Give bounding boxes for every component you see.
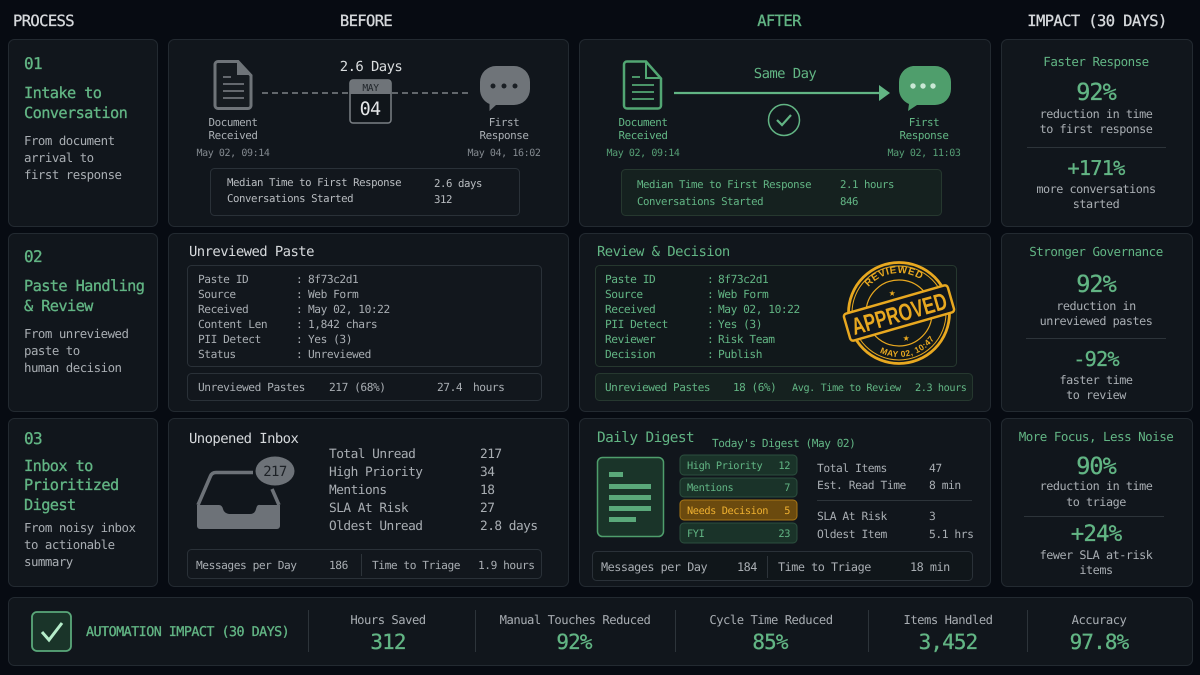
panel: process 03: Inbox to <box>24 457 93 475</box>
paste record: Status <box>198 348 236 361</box>
review record: : <box>707 348 713 361</box>
panel: impact faster response: +171% <box>1068 156 1125 180</box>
metric: hours saved <box>350 613 426 654</box>
inbox stats: 2.8 days <box>480 519 538 534</box>
stamp: approved: APPROVED <box>849 288 950 341</box>
panel: impact governance: unreviewed pastes <box>1040 314 1152 328</box>
digest metrics: Time to Triage <box>778 560 871 574</box>
digest categories: 23 <box>778 528 790 540</box>
column headers: IMPACT (30 DAYS) <box>1027 12 1167 30</box>
paste record: : <box>296 303 302 316</box>
metric: items handled <box>903 613 993 654</box>
review record: Paste ID <box>605 273 656 286</box>
panel: automation impact bar: AUTOMATION IMPACT (30 DAYS) <box>86 625 289 640</box>
stamp: approved: MAY 02, 10:47 <box>880 336 933 357</box>
digest stats: Total Items <box>817 462 887 475</box>
panel: impact focus: 90% <box>1076 452 1117 480</box>
review record: Decision <box>605 348 655 361</box>
panel: process 03: to actionable <box>24 537 115 552</box>
inbox stats: 34 <box>480 465 495 480</box>
digest stats: Est. Read Time <box>817 479 907 492</box>
panel: after intake: May 02, 09:14 <box>606 148 680 159</box>
inbox metrics: 1.9 hours <box>478 559 535 572</box>
inbox stats: 217 <box>480 447 502 462</box>
panel: process 01: From document <box>24 133 115 148</box>
digest categories: 7 <box>784 482 790 494</box>
panel: impact governance: 92% <box>1076 270 1117 298</box>
panel: after intake: Received <box>619 129 667 142</box>
panel: process 01: first response <box>24 167 122 182</box>
panel: after review: Review & Decision <box>597 244 730 260</box>
panel: process 03: summary <box>24 554 73 569</box>
paste record: 8f73c2d1 <box>308 273 358 286</box>
stats box: 2.1 hours <box>840 178 894 191</box>
review record: May 02, 10:22 <box>718 303 800 316</box>
metric: accuracy <box>1070 613 1130 654</box>
icon: check circle <box>768 104 800 136</box>
inbox metrics: Messages per Day <box>196 559 297 572</box>
stamp: approved: REVIEWED <box>864 266 922 286</box>
digest categories <box>680 455 797 543</box>
panel: before paste <box>168 234 568 412</box>
panel: before intake <box>168 40 568 226</box>
review record: : <box>707 288 713 301</box>
review metrics <box>596 374 972 400</box>
metric: cycle time: 85% <box>752 630 789 654</box>
review record: Risk Team <box>718 333 775 346</box>
review metrics: Unreviewed Pastes <box>605 381 710 394</box>
panel: before intake: Document <box>209 116 257 129</box>
column headers: AFTER <box>757 12 802 30</box>
column headers: PROCESS <box>13 12 74 30</box>
panel: impact focus: reduction in time <box>1040 479 1153 493</box>
panel: automation impact bar <box>8 598 1192 666</box>
paste record: : <box>296 348 302 361</box>
digest stats: 5.1 hrs <box>929 528 973 541</box>
digest stats: 3 <box>929 510 935 523</box>
metric: cycle time <box>709 613 833 654</box>
panel: impact faster response: reduction in time <box>1040 107 1153 121</box>
panel: process 02: human decision <box>24 360 122 375</box>
paste record <box>188 266 542 366</box>
review record: : <box>707 303 713 316</box>
panel: before intake: First <box>489 116 519 129</box>
review record: 8f73c2d1 <box>718 273 768 286</box>
inbox metrics <box>188 550 542 578</box>
column headers <box>13 12 1167 30</box>
panel: impact faster response: Faster Response <box>1043 54 1149 69</box>
paste record: Received <box>198 303 248 316</box>
metric: manual touches <box>500 613 650 654</box>
metric: items handled: 3,452 <box>919 630 977 654</box>
inbox stats: High Priority <box>329 465 423 480</box>
inbox metrics: Time to Triage <box>372 559 461 572</box>
paste record: : <box>296 333 302 346</box>
panel: before intake: May 04, 16:02 <box>467 148 541 159</box>
panel: process 02: paste to <box>24 343 80 358</box>
digest categories: High Priority <box>687 460 762 472</box>
stats box <box>622 170 942 216</box>
paste metrics <box>188 374 542 400</box>
panel: after digest: Today's Digest (May 02) <box>712 437 855 450</box>
icon: document grey <box>215 61 251 108</box>
panel: before inbox <box>168 418 568 586</box>
review record: : <box>707 333 713 346</box>
stamp: approved: ★ <box>889 286 896 299</box>
column headers: BEFORE <box>340 12 392 30</box>
review record: : <box>707 318 713 331</box>
digest categories: FYI <box>687 528 705 540</box>
icon: calendar: 04 <box>360 99 381 120</box>
panel: after digest <box>580 418 990 586</box>
panel: after intake: First <box>909 116 939 129</box>
digest categories: Needs Decision <box>687 505 768 517</box>
metric: accuracy: Accuracy <box>1072 613 1127 627</box>
panel: process 01 <box>8 40 158 226</box>
panel: after digest: Daily Digest <box>597 430 694 446</box>
panel: process 01: 01 <box>24 54 42 73</box>
digest categories: Mentions <box>687 482 734 494</box>
panel: before intake: Received <box>209 129 257 142</box>
paste record: Paste ID <box>198 273 249 286</box>
review record: Web Form <box>718 288 769 301</box>
digest stats: Oldest Item <box>817 528 887 541</box>
icon: speech bubble grey <box>480 66 530 111</box>
panel: after intake: Document <box>619 116 667 129</box>
panel: process 02 <box>8 234 158 412</box>
stats box: Median Time to First Response <box>637 178 811 191</box>
stamp: approved: ★ <box>903 331 910 344</box>
stats box: 2.6 days <box>434 177 482 190</box>
panel: before paste: Unreviewed Paste <box>189 244 314 260</box>
paste record: Yes (3) <box>308 333 352 346</box>
review metrics: 2.3 hours <box>915 383 967 394</box>
panel: impact faster response: more conversations <box>1036 182 1156 196</box>
inbox stats: 27 <box>480 501 494 516</box>
metric: hours saved: Hours Saved <box>350 613 426 627</box>
panel: impact faster response: started <box>1073 197 1119 211</box>
digest stats: SLA At Risk <box>817 510 887 523</box>
digest categories: 12 <box>778 460 790 472</box>
panel: before intake: May 02, 09:14 <box>196 148 270 159</box>
paste metrics: hours <box>473 381 504 394</box>
inbox stats: Total Unread <box>329 447 415 462</box>
panel: process 02: & Review <box>24 297 94 315</box>
stats box: Conversations Started <box>637 195 763 208</box>
panel: impact governance <box>1002 234 1192 412</box>
panel: process 02: Paste Handling <box>24 277 144 295</box>
paste record: 1,842 chars <box>308 318 377 331</box>
review metrics: Avg. Time to Review <box>792 383 902 394</box>
metric: manual touches: 92% <box>556 630 593 654</box>
panel: process 03: From noisy inbox <box>24 520 135 535</box>
metric: accuracy: 97.8% <box>1070 630 1130 654</box>
inbox stats: Oldest Unread <box>329 519 423 534</box>
inbox stats: 18 <box>480 483 494 498</box>
stats box: 312 <box>434 193 452 206</box>
icon: speech bubble green <box>899 66 951 111</box>
panel: process 01: Intake to <box>24 84 102 102</box>
metric: items handled: Items Handled <box>903 613 993 627</box>
metric: manual touches: Manual Touches Reduced <box>500 613 650 627</box>
panel: impact focus: More Focus, Less Noise <box>1019 429 1173 444</box>
panel: impact faster response: 92% <box>1076 78 1117 106</box>
inbox stats: Mentions <box>329 483 387 498</box>
label: same day: Same Day <box>754 66 816 82</box>
inbox metrics: 186 <box>329 559 349 572</box>
review record <box>596 266 956 366</box>
panel: process 03: Prioritized <box>24 476 119 494</box>
review metrics: 18 (6%) <box>733 381 776 394</box>
panel: impact focus: fewer SLA at-risk <box>1040 548 1153 562</box>
panel: process 01: arrival to <box>24 150 94 165</box>
digest metrics: 184 <box>737 560 757 574</box>
panel: impact governance: to review <box>1066 388 1127 402</box>
paste record: PII Detect <box>198 333 261 346</box>
paste record: Unreviewed <box>308 348 371 361</box>
digest metrics: Messages per Day <box>601 560 707 574</box>
metric: cycle time: Cycle Time Reduced <box>709 613 833 627</box>
panel: impact faster response <box>1002 40 1192 226</box>
paste metrics: Unreviewed Pastes <box>198 381 305 394</box>
panel: impact governance: faster time <box>1060 373 1133 387</box>
paste record: May 02, 10:22 <box>308 303 390 316</box>
inbox stats <box>329 447 538 534</box>
panel: before inbox: Unopened Inbox <box>189 431 298 447</box>
paste record: : <box>296 318 302 331</box>
panel: impact focus <box>1002 418 1192 586</box>
digest stats: 47 <box>929 462 942 475</box>
panel: impact faster response: to first response <box>1040 122 1153 136</box>
inbox stats: SLA At Risk <box>329 501 409 516</box>
panel: impact governance: -92% <box>1073 347 1119 371</box>
stats box: Conversations Started <box>227 192 353 205</box>
review record: Received <box>605 303 655 316</box>
digest stats <box>817 462 973 541</box>
panel: impact governance: reduction in <box>1056 299 1136 313</box>
digest metrics: 18 min <box>910 560 950 574</box>
icon: inbox tray <box>197 456 294 529</box>
stats box: 846 <box>840 195 858 208</box>
duration label: 2.6 Days <box>340 59 402 75</box>
panel: process 03: Digest <box>24 496 76 514</box>
paste record: : <box>296 273 302 286</box>
stats box: Median Time to First Response <box>227 176 401 189</box>
panel: impact focus: +24% <box>1071 521 1123 547</box>
paste record: : <box>296 288 302 301</box>
review record: Source <box>605 288 643 301</box>
paste metrics: 27.4 <box>437 381 463 394</box>
stats box <box>210 168 520 216</box>
review record: PII Detect <box>605 318 668 331</box>
panel: process 02: 02 <box>24 247 42 266</box>
icon: document green <box>624 62 661 108</box>
dashed timeline <box>262 92 472 94</box>
panel: process 03: 03 <box>24 429 42 448</box>
paste record: Web Form <box>308 288 359 301</box>
panel: process 03 <box>8 418 158 586</box>
review record: : <box>707 273 713 286</box>
panel: process 01: Conversation <box>24 104 127 122</box>
digest categories: 5 <box>784 505 790 517</box>
arrow <box>674 85 890 101</box>
icon: inbox tray: 217 <box>263 464 287 480</box>
panel: after intake: Response <box>900 129 948 142</box>
panel: after intake <box>580 40 990 226</box>
icon: digest document <box>598 458 664 536</box>
review record: Reviewer <box>605 333 656 346</box>
icon: calendar: MAY <box>362 83 379 94</box>
panel: impact focus: to triage <box>1066 495 1126 509</box>
paste metrics: 217 (68%) <box>329 381 386 394</box>
panel: process 02: From unreviewed <box>24 326 128 341</box>
paste record: Content Len <box>198 318 267 331</box>
review record: Publish <box>718 348 762 361</box>
panel: before intake: Response <box>480 129 528 142</box>
digest stats: 8 min <box>929 479 961 492</box>
panel: impact focus: items <box>1079 563 1113 577</box>
icon: calendar <box>350 80 391 123</box>
panel: after intake: May 02, 11:03 <box>887 148 961 159</box>
metric: hours saved: 312 <box>370 630 406 654</box>
stamp: approved <box>842 261 956 365</box>
paste record: Source <box>198 288 236 301</box>
panel: impact governance: Stronger Governance <box>1029 244 1163 259</box>
review record: Yes (3) <box>718 318 762 331</box>
panel: after review <box>579 233 991 412</box>
icon: checkbox <box>32 612 71 651</box>
digest metrics <box>592 552 972 580</box>
